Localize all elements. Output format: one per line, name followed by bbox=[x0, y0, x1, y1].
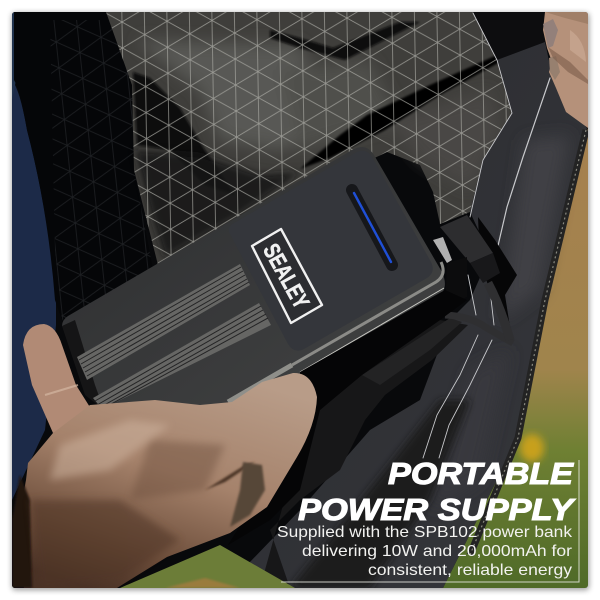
LED slot bbox=[352, 190, 392, 265]
stitching lines bbox=[423, 13, 550, 458]
shadow under lower pocket bbox=[290, 400, 470, 588]
power bank top panel bbox=[302, 244, 432, 350]
finger crease bbox=[45, 385, 78, 395]
description text: consistent, reliable energy bbox=[368, 562, 572, 579]
upper dark jacket lining bbox=[476, 19, 499, 60]
mottled dark fabric zone bbox=[135, 150, 300, 258]
index finger bbox=[23, 324, 93, 433]
description text bbox=[277, 524, 573, 579]
blue LED bbox=[354, 193, 391, 262]
headline: PORTABLE bbox=[388, 456, 574, 491]
hair shading bbox=[32, 498, 178, 571]
zipper edge bbox=[470, 130, 586, 555]
blue shirt sliver bbox=[12, 80, 56, 500]
lining shadow with faint pattern bbox=[14, 12, 56, 302]
description text: delivering 10W and 20,000mAh for bbox=[302, 543, 573, 560]
grass triangle bbox=[120, 545, 295, 588]
dark mesh pocket bbox=[260, 320, 468, 588]
stripe band two bbox=[93, 303, 271, 409]
black shadow beside the plug bbox=[478, 217, 517, 322]
SEALEY logo: SEALEY bbox=[258, 239, 315, 313]
USB cable and plug bbox=[433, 215, 513, 343]
knuckle shadow bbox=[230, 462, 265, 527]
thumb knuckle shade bbox=[205, 462, 255, 490]
power bank left dark end bbox=[62, 320, 98, 404]
power bank metallic edge bbox=[292, 262, 443, 365]
yellow bokeh bbox=[520, 434, 544, 462]
triangle pattern overlay bbox=[106, 12, 512, 265]
lit highlights bbox=[144, 36, 492, 177]
holding hand bbox=[12, 324, 317, 588]
fingers top right bbox=[543, 12, 588, 128]
left dark hand edge bbox=[12, 475, 32, 588]
black area under the power bank bbox=[282, 291, 451, 508]
headline: POWER SUPPLY bbox=[298, 492, 577, 527]
dark fabric folds bbox=[132, 21, 498, 169]
stripe band one bbox=[77, 264, 250, 380]
power bank body bbox=[62, 147, 445, 405]
headline bbox=[298, 456, 577, 527]
text frame lines bbox=[281, 460, 579, 582]
gray inner fabric bbox=[225, 42, 587, 588]
description text: Supplied with the SPB102 power bank bbox=[277, 524, 573, 541]
lit back of hand bbox=[50, 420, 170, 480]
patterned lining lit fabric bbox=[106, 12, 512, 265]
power bank bbox=[62, 147, 445, 405]
back of hand and thumb bbox=[14, 373, 317, 588]
